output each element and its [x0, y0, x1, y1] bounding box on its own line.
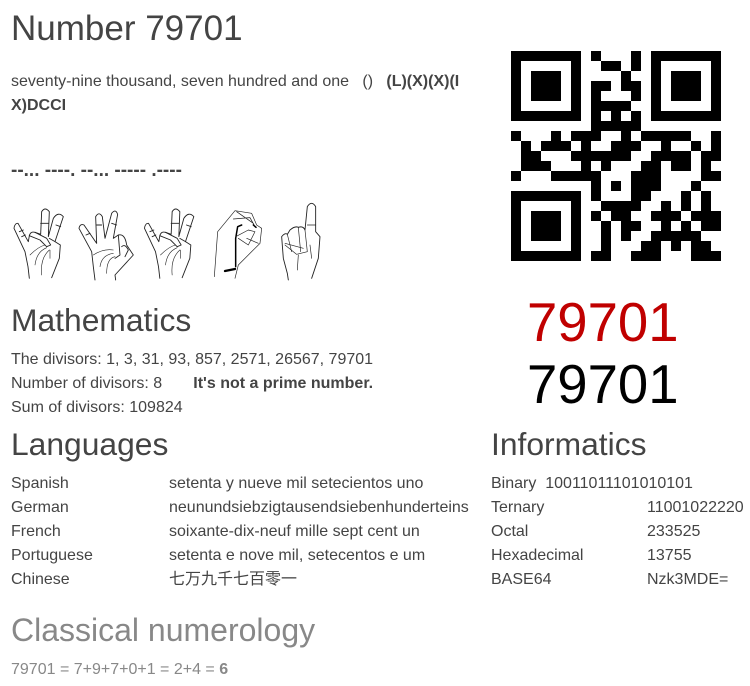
- informatics labels: Hexadecimal: [491, 547, 583, 564]
- icon: sign language hands: [14, 202, 320, 280]
- language names: Chinese: [11, 571, 70, 588]
- informatics values: 11001022220: [647, 499, 744, 516]
- informatics labels: Octal: [491, 523, 528, 540]
- icon: hand sign 7: [14, 209, 63, 278]
- heading: Informatics: Informatics: [491, 426, 646, 462]
- morse code: --... ----. --... ----- .----: [11, 160, 182, 181]
- title: Number 79701: [11, 9, 243, 48]
- language translations: [169, 475, 469, 588]
- number in black: 79701: [527, 354, 679, 415]
- language names: Spanish: [11, 475, 69, 492]
- heading: Classical numerology: Classical numerology: [11, 612, 315, 648]
- language names: French: [11, 523, 61, 540]
- informatics labels: Ternary: [491, 499, 544, 516]
- language translations: soixante-dix-neuf mille sept cent un: [169, 523, 420, 540]
- language names: [11, 475, 93, 588]
- informatics values: 233525: [647, 523, 700, 540]
- icon: hand sign 9: [79, 211, 133, 280]
- language translations: neunundsiebzigtausendsiebenhunderteins: [169, 499, 469, 516]
- informatics labels: [491, 499, 583, 588]
- number in red: 79701: [527, 292, 679, 353]
- icon: hand sign 1: [282, 203, 320, 280]
- informatics values: [647, 499, 744, 588]
- informatics labels: BASE64: [491, 571, 551, 588]
- language names: Portuguese: [11, 547, 93, 564]
- language translations: setenta y nueve mil setecientos uno: [169, 475, 423, 492]
- mathematics facts: [11, 351, 373, 416]
- mathematics facts: The divisors: 1, 3, 31, 93, 857, 2571, 26567, 79701: [11, 351, 373, 368]
- heading: Languages: Languages: [11, 426, 168, 462]
- numerology calculation: 79701 = 7+9+7+0+1 = 2+4 = 6: [11, 661, 228, 678]
- language names: German: [11, 499, 69, 516]
- heading: Mathematics: Mathematics: [11, 302, 191, 338]
- mathematics facts: Number of divisors: 8 It's not a prime number.: [11, 375, 373, 392]
- binary row: Binary 10011011101010101: [491, 475, 693, 492]
- number in words and roman numerals: X)DCCI: [11, 97, 66, 114]
- language translations: 七万九千七百零一: [169, 571, 297, 588]
- icon: hand sign 7 repeat: [144, 209, 194, 278]
- informatics values: 13755: [647, 547, 692, 564]
- icon: hand sign 0: [214, 211, 262, 278]
- number in words and roman numerals: [11, 73, 459, 114]
- informatics values: Nzk3MDE=: [647, 571, 728, 588]
- mathematics facts: Sum of divisors: 109824: [11, 399, 183, 416]
- number in words and roman numerals: seventy-nine thousand, seven hundred and one () (L)(X)(X)(I: [11, 73, 459, 90]
- language translations: setenta e nove mil, setecentos e um: [169, 547, 425, 564]
